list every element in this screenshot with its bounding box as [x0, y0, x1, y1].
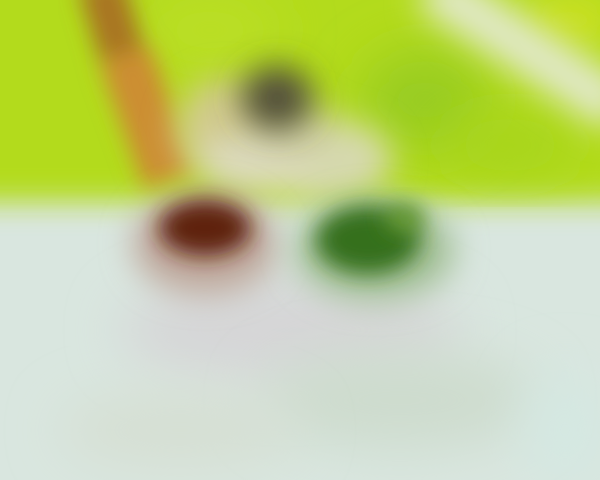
- beige central food mass: [175, 78, 393, 202]
- panel: lime green backdrop: [0, 0, 600, 202]
- brown wooden stick: [100, 0, 170, 180]
- white strip, top right: [430, 0, 600, 110]
- bowl: brown contents: [133, 194, 277, 294]
- dark spot, upper centre: [241, 66, 313, 130]
- bowl: green contents: [295, 200, 455, 300]
